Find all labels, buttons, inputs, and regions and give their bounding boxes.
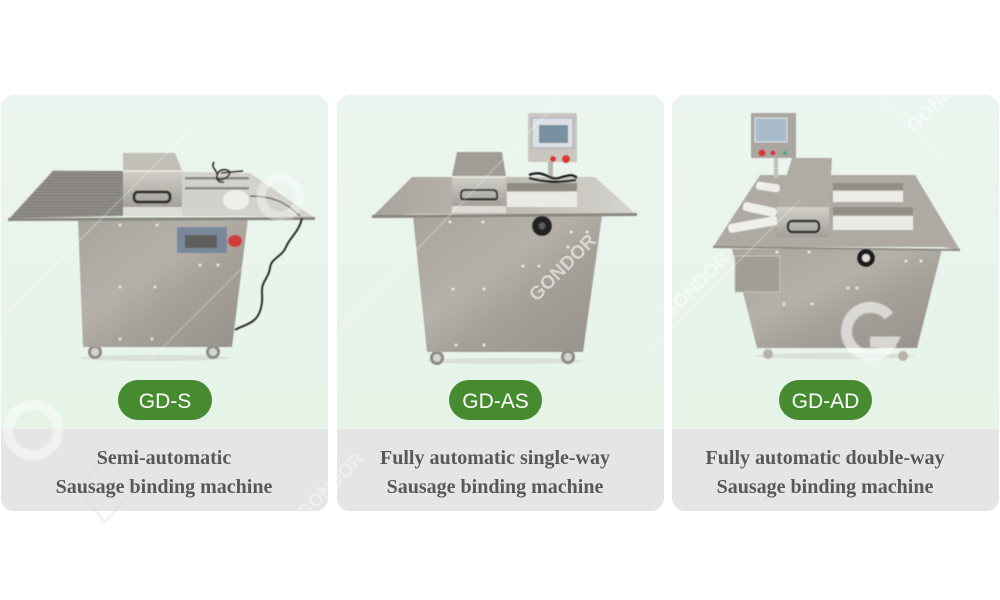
panel: GD-AS [337, 95, 664, 511]
model badge: GD-S [118, 380, 212, 420]
caption background: GD-AS [337, 429, 664, 511]
model badge: GD-AD: GD-AD [792, 390, 859, 413]
watermark text: GONDOR right: GONDOR [658, 248, 734, 324]
caption: GD-AS: Fully automatic single-way [380, 447, 610, 469]
watermark: logo on GD-S [261, 178, 299, 216]
watermark text: GONDOR centre: GONDOR [525, 230, 601, 306]
model badge: GD-AD [779, 380, 872, 420]
panel: GD-AD [672, 95, 999, 511]
watermark: faint diagonal stripes [0, 100, 1000, 360]
panel: GD-S [1, 95, 328, 511]
caption: GD-S: Sausage binding machine [56, 476, 272, 498]
watermark text: GONDOR lower: GONDOR [293, 448, 369, 524]
model badge: GD-S: GD-S [139, 390, 191, 413]
machine: semi-automatic GD-S [8, 153, 315, 361]
caption: GD-AD: Sausage binding machine [717, 476, 933, 498]
watermark: logo outline lower left [78, 458, 135, 522]
caption background: GD-S [1, 429, 328, 511]
watermark: logo lower left [8, 405, 58, 455]
caption: GD-AD: Fully automatic double-way [706, 447, 944, 469]
watermark text: GONDOR top right: GONDOR [903, 61, 979, 137]
machine: single-way GD-AS [372, 113, 637, 365]
watermark: logo on GD-AD [847, 307, 892, 355]
caption: GD-S: Semi-automatic [97, 447, 231, 469]
model badge: GD-AS: GD-AS [462, 390, 529, 413]
model badge: GD-AS [449, 380, 542, 420]
watermarks: GONDOR logos and stripes [0, 100, 1000, 522]
machine: double-way GD-AD [713, 113, 960, 361]
caption background: GD-AD [672, 429, 999, 511]
caption: GD-AS: Sausage binding machine [387, 476, 603, 498]
